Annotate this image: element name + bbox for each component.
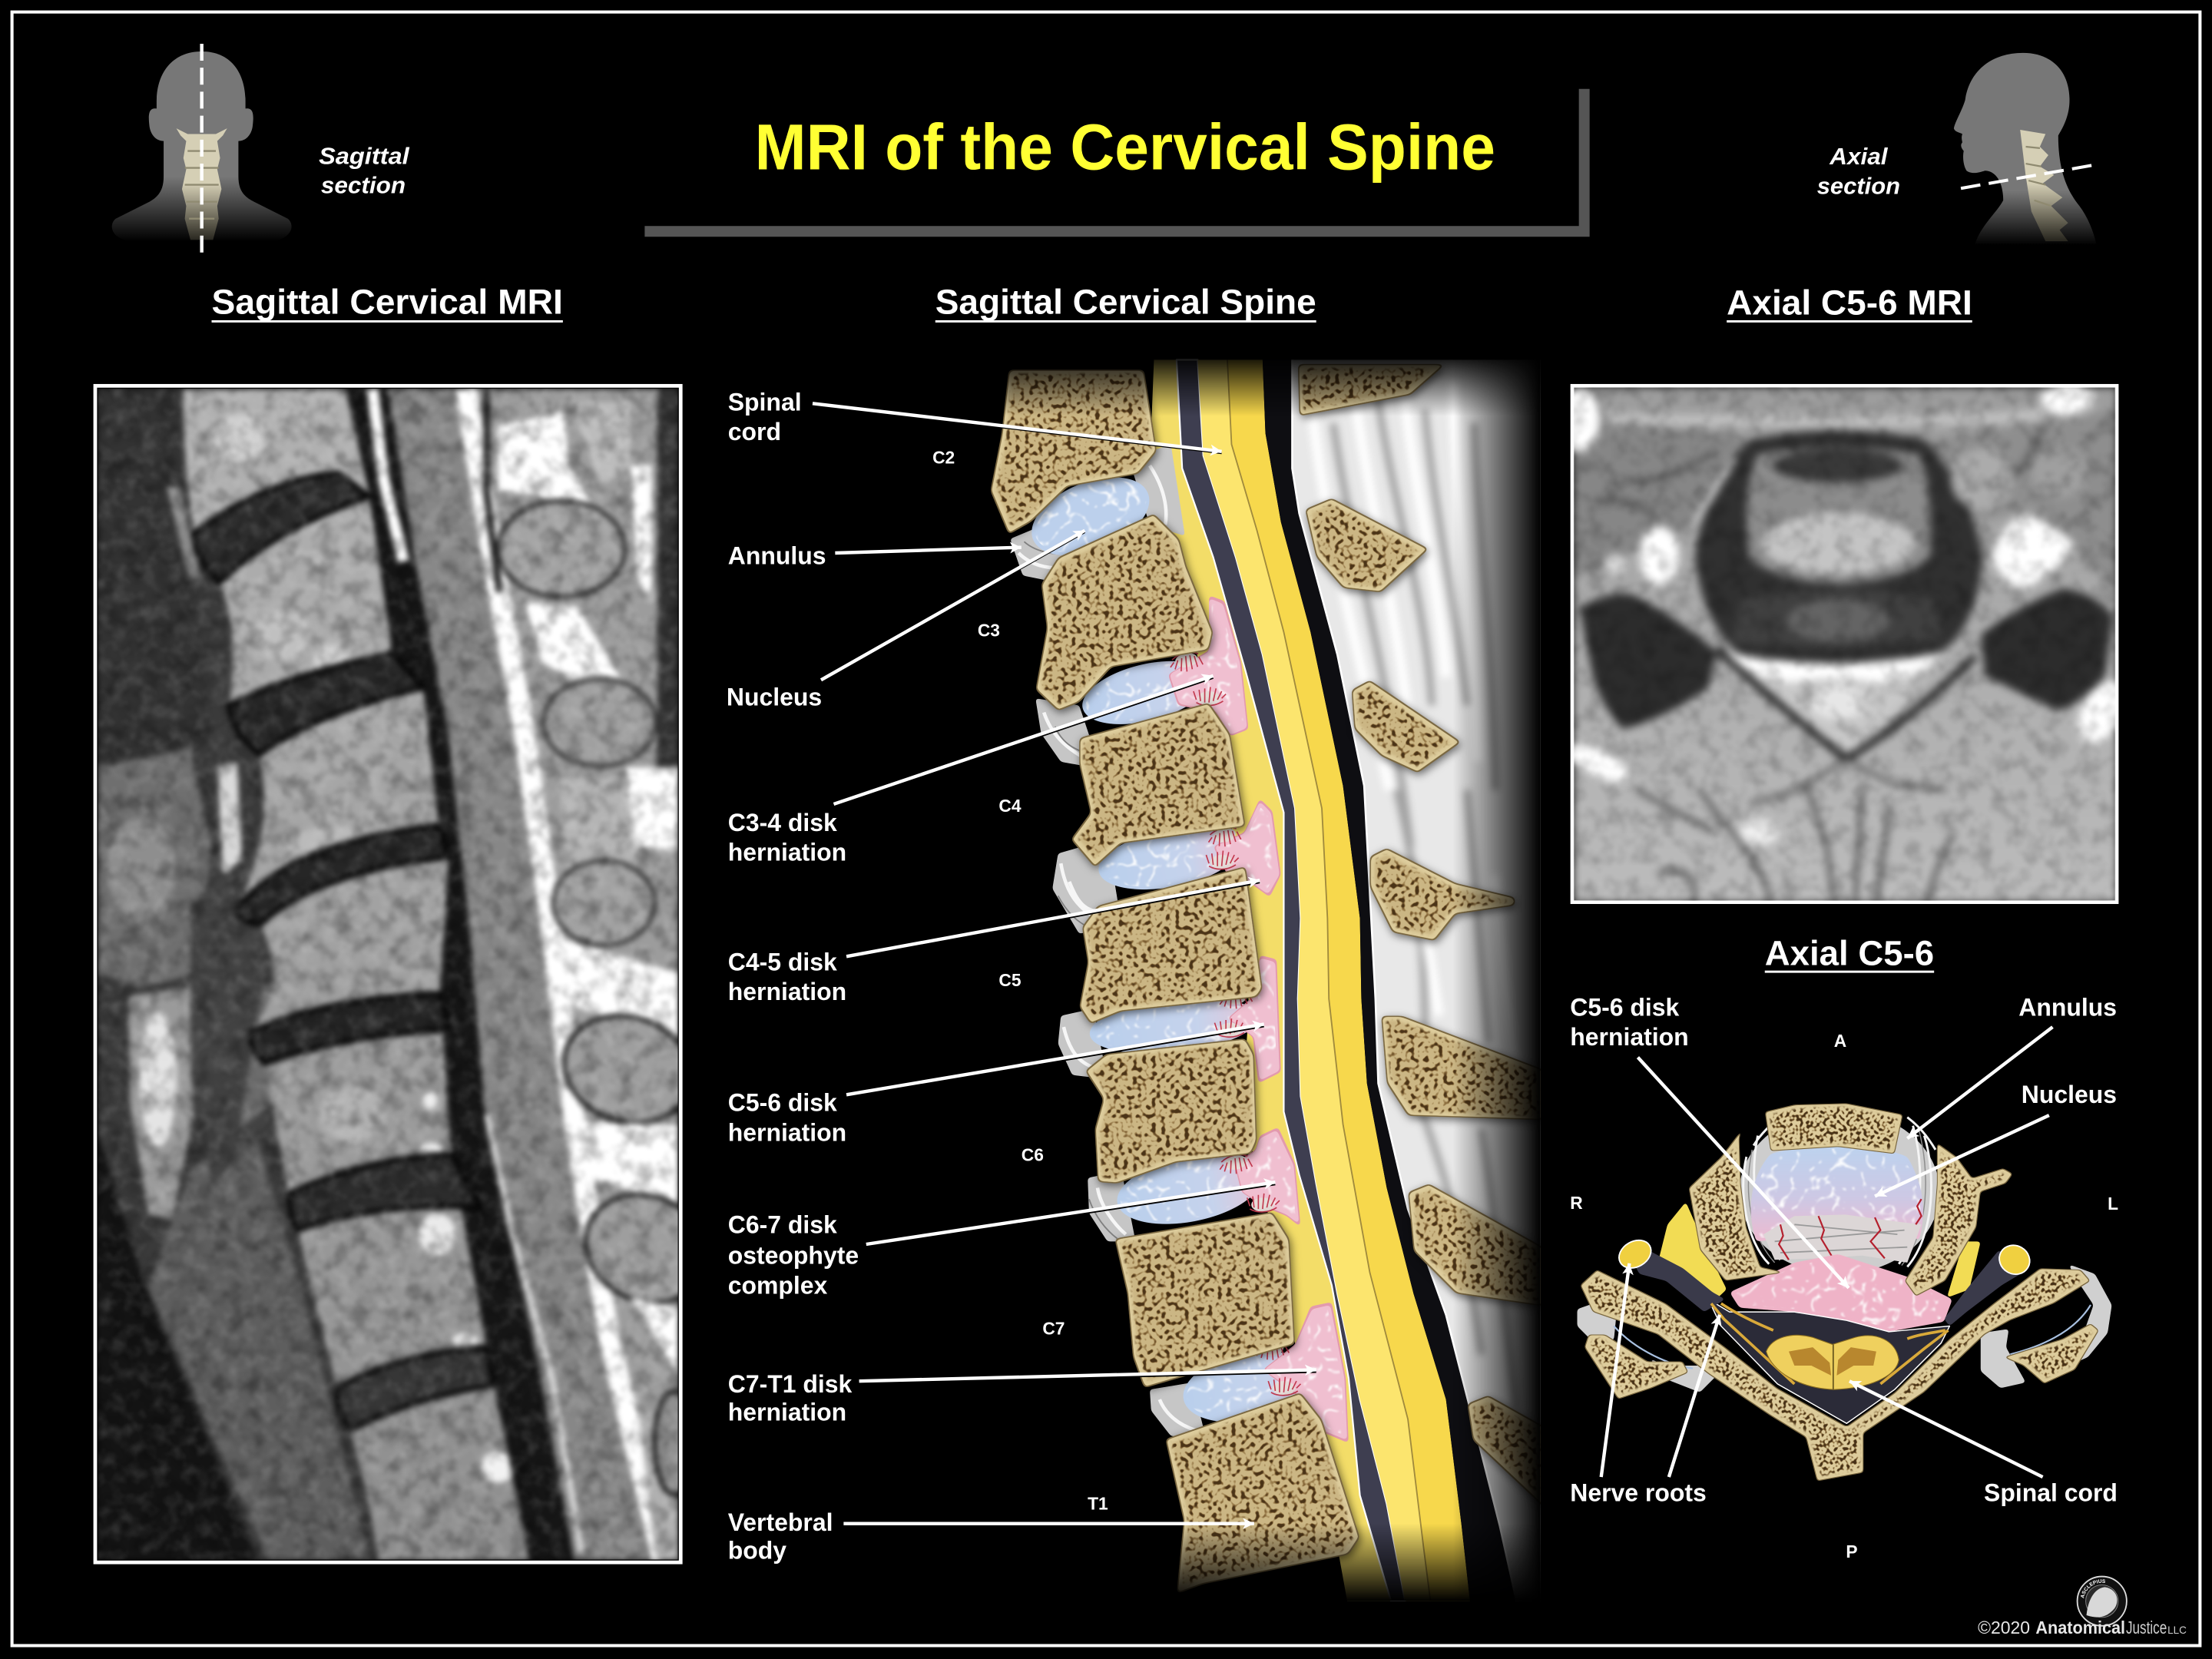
orientation letters: L — [2108, 1194, 2118, 1214]
heading: Axial C5-6 MRI: Axial C5-6 MRI — [1727, 283, 1972, 323]
callout: C7-T1 disk herniation: herniation — [728, 1399, 846, 1426]
callout: spinal cord: Spinal — [728, 388, 802, 416]
facet capsules — [1577, 1264, 2112, 1392]
callout: spinal cord: cord — [728, 418, 781, 445]
callout: annulus — [728, 542, 1022, 570]
text: axial section: section — [1817, 174, 1900, 200]
muscle and ligament background — [1292, 359, 1551, 1601]
herniation fill — [1170, 598, 1347, 1440]
icon: head profile with axial section line — [1954, 53, 2098, 244]
callout: C6-7 disk osteophyte complex — [728, 1182, 1275, 1299]
nerve root ends — [1614, 1235, 2035, 1280]
callout: annulus: Annulus — [728, 542, 826, 570]
text: sagittal section: section — [321, 173, 406, 199]
callout: spinal cord — [1849, 1381, 2118, 1506]
icon: head front with sagittal section line — [112, 44, 292, 255]
callout: vertebral body: Vertebral — [728, 1508, 833, 1536]
orientation letters: R — [1570, 1193, 1583, 1213]
vertebra level labels: C4 — [998, 796, 1022, 816]
vertebra level labels: C3 — [978, 620, 1000, 640]
vertebral bodies — [990, 364, 1546, 1594]
text: sagittal section: Sagittal — [319, 144, 409, 170]
vertebra level labels: C2 — [932, 447, 955, 467]
title bracket — [644, 89, 1584, 231]
callout: nucleus: Nucleus — [2022, 1081, 2117, 1108]
copyright: ©2020 — [1978, 1618, 2030, 1637]
panel: axial MRI — [1558, 384, 2136, 903]
callout: nucleus — [727, 531, 1084, 710]
disk herniations — [1168, 595, 1349, 1443]
callout: C3-4 disk herniation: herniation — [728, 838, 846, 866]
orientation letters: A — [1834, 1031, 1846, 1051]
callout: nucleus: Nucleus — [727, 683, 822, 710]
callout: C4-5 disk herniation: herniation — [728, 978, 846, 1005]
callout: C4-5 disk herniation — [728, 880, 1260, 1005]
copyright: Justice — [2126, 1618, 2167, 1637]
nerve root sleeves — [1634, 1250, 2023, 1326]
vertebra level labels: C7 — [1042, 1319, 1065, 1339]
callout: annulus: Annulus — [2018, 993, 2117, 1021]
facet joint line — [1614, 1305, 2091, 1369]
nucleus — [1751, 1146, 1923, 1241]
vertebra level labels: C5 — [998, 970, 1022, 990]
vertebra level labels: T1 — [1088, 1493, 1108, 1513]
disks nucleus — [1020, 462, 1320, 1432]
logo medallion: ASCLEPIUS — [2081, 1579, 2105, 1598]
spinal cord section — [1767, 1335, 1899, 1389]
callout: C6-7 disk osteophyte complex: C6-7 disk — [728, 1210, 837, 1238]
callout: C7-T1 disk herniation — [728, 1369, 1316, 1426]
epidural fat — [1150, 359, 1391, 1601]
bones — [1580, 1103, 2099, 1482]
heading: Sagittal Cervical Spine: Sagittal Cervical Spine — [935, 283, 1316, 322]
callout: C5-6 disk herniation: C5-6 disk — [1570, 993, 1680, 1021]
vertebra level labels — [932, 447, 1108, 1513]
vertebra level labels: C6 — [1022, 1145, 1044, 1165]
text: axial section — [1817, 144, 1900, 200]
callout: C5-6 disk herniation — [728, 1024, 1264, 1147]
callout: C5-6 disk herniation: herniation — [728, 1119, 846, 1147]
nerve roots in canal — [1711, 1303, 1949, 1384]
illustration: sagittal cervical spine — [973, 353, 1568, 1622]
callout: nerve roots — [1570, 1263, 1720, 1506]
copyright: Anatomical — [2035, 1618, 2125, 1637]
spinal cord and thecal sac — [1177, 359, 1516, 1601]
callout: annulus — [1907, 993, 2117, 1138]
callout: C6-7 disk osteophyte complex: osteophyte — [728, 1242, 859, 1270]
callout: C6-7 disk osteophyte complex: complex — [728, 1271, 828, 1299]
annulus — [1740, 1111, 1940, 1274]
copyright — [1978, 1618, 2187, 1637]
callout: spinal cord: Spinal cord — [1984, 1479, 2118, 1506]
annular tears — [1168, 651, 1300, 1396]
callout: C4-5 disk herniation: C4-5 disk — [728, 949, 837, 976]
panel: sagittal MRI — [95, 386, 724, 1562]
copyright: LLC — [2167, 1624, 2187, 1636]
spinal canal — [1708, 1300, 1949, 1423]
callout: C5-6 disk herniation: C5-6 disk — [728, 1088, 837, 1116]
labels: sagittal spine — [727, 388, 1316, 1565]
callout: nucleus — [1875, 1081, 2117, 1197]
callout: spinal cord — [728, 388, 1222, 453]
callout: C5-6 disk herniation — [1570, 993, 1849, 1288]
logo medallion — [2077, 1576, 2128, 1627]
title: MRI of the Cervical Spine — [755, 111, 1495, 183]
callout: vertebral body — [728, 1508, 1254, 1565]
torn annulus — [1763, 1199, 1922, 1263]
herniated disk — [1730, 1254, 1952, 1332]
heading: Sagittal Cervical MRI: Sagittal Cervical MRI — [212, 283, 563, 322]
callout: nerve roots: Nerve roots — [1570, 1479, 1707, 1506]
art fades — [1453, 353, 1541, 1622]
callout: C7-T1 disk herniation: C7-T1 disk — [728, 1370, 853, 1398]
orientation letters: P — [1846, 1541, 1858, 1561]
callout: C3-4 disk herniation: C3-4 disk — [728, 809, 837, 836]
heading: Axial C5-6: Axial C5-6 — [1765, 933, 1934, 972]
callout: C3-4 disk herniation — [728, 676, 1214, 866]
epidural fat — [1659, 1202, 1981, 1306]
callout: C5-6 disk herniation: herniation — [1570, 1023, 1689, 1051]
text: axial section: Axial — [1829, 144, 1888, 170]
text: sagittal section — [319, 144, 409, 199]
callout: vertebral body: body — [728, 1537, 786, 1565]
orientation letters — [1570, 1031, 2118, 1561]
illustration: axial C5-6 — [1570, 993, 2118, 1561]
annulus folds — [1010, 445, 1206, 1439]
